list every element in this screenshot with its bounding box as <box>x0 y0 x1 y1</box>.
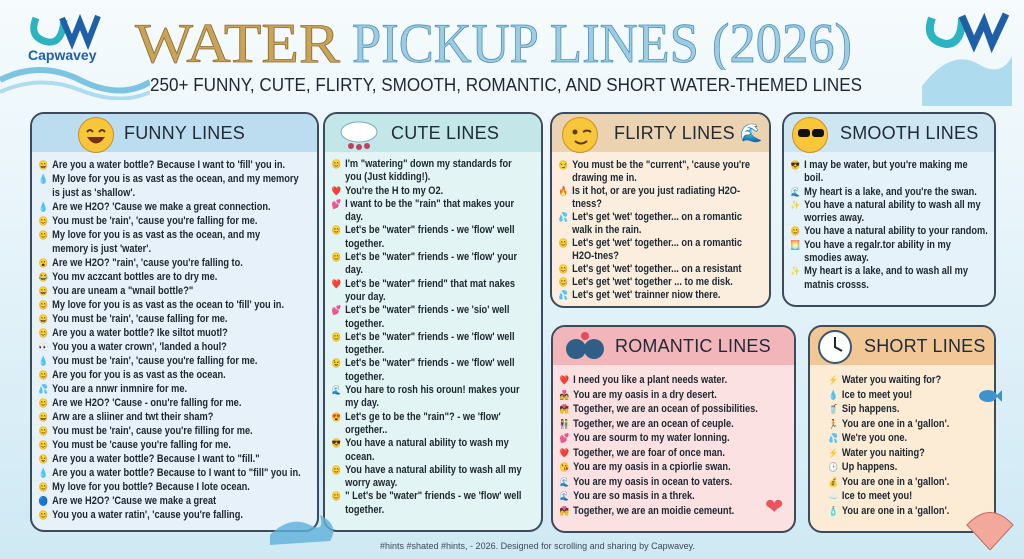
list: romantic lines: 💑 <box>560 390 569 400</box>
list: funny lines: Are you a water bottle? Because I want to "fill." <box>52 453 260 465</box>
list: flirty lines: 😊 <box>559 277 568 287</box>
list: short lines: Ice to meet you! <box>842 388 912 400</box>
list: cute lines: 🌊 <box>332 385 341 395</box>
list: funny lines: 😊 <box>39 482 48 492</box>
list: funny lines: 😊 <box>39 510 48 520</box>
heading: romantic: ROMANTIC LINES <box>615 336 771 356</box>
list: funny lines: Are we H2O? 'Cause we make a great connection. <box>52 201 271 213</box>
list: funny lines: 😂 <box>39 272 48 282</box>
list: cute lines: Let's be "water" friends - we 'flow' well together. <box>345 224 515 250</box>
list: funny lines: You mv aczcant bottles are to dry me. <box>52 271 217 283</box>
list: funny lines: 😊 <box>39 440 48 450</box>
list: smooth lines: You have a regalr.tor ability in my smodies away. <box>804 239 951 264</box>
heading: short <box>810 327 994 365</box>
list: romantic lines: Together, we are an ocean of ceuple. <box>573 418 734 430</box>
list: romantic lines: 🌊 <box>560 491 569 501</box>
list: short lines: You are one in a 'gallon'. <box>842 476 949 488</box>
list: smooth lines <box>791 159 988 291</box>
list: flirty lines: Let's get 'wet' together... on a resistant <box>572 263 742 275</box>
list: cute lines: 😊 <box>332 159 341 169</box>
list: funny lines: 😊 <box>39 300 48 310</box>
list: funny lines: is just as 'shallow'. <box>52 187 135 199</box>
list: romantic lines: You are my oasis in a cpiorlie swan. <box>573 461 731 473</box>
list: smooth lines: 🌊 <box>791 187 800 197</box>
list: flirty lines: 🔥 <box>559 186 568 196</box>
decorative waves left <box>0 67 150 100</box>
list: funny lines: 💧 <box>39 174 48 184</box>
list: cute lines: Let's be "water" friends - we 'sio' well together. <box>345 304 509 330</box>
list: short lines: 🏃 <box>828 418 838 428</box>
list: funny lines: 😊 <box>39 398 48 408</box>
list: funny lines: You are a nnwr inmnire for me. <box>52 383 187 395</box>
list: funny lines: My love for you is as vast as the ocean to 'fill' you in. <box>52 299 284 311</box>
list: flirty lines: Let's get 'wet' together ... to me disk. <box>572 276 733 288</box>
panel: romantic lines <box>551 325 796 533</box>
list: funny lines: Are we H2O? 'Cause we make a great <box>52 495 216 507</box>
heading: cute: CUTE LINES <box>391 122 499 142</box>
list: cute lines: You hare to rosh his oroun! makes your my day. <box>345 384 520 409</box>
list: flirty lines: Is it hot, or are you just radiating H2O-tness? <box>572 185 740 210</box>
list: funny lines: 👀 <box>39 342 48 352</box>
list: short lines: 💰 <box>828 476 838 486</box>
list: flirty lines: Let's get 'wet' together... on a romantic walk in the rain. <box>572 211 742 236</box>
list: short lines: ⚡ <box>828 375 838 385</box>
heading: flirty: FLIRTY LINES 🌊 <box>614 122 763 142</box>
heading: cute <box>325 114 541 152</box>
list: smooth lines: I may be water, but you're making me boil. <box>804 159 968 184</box>
list: romantic lines: Together, we are an moidie cemeunt. <box>573 504 734 516</box>
list: funny lines <box>38 159 301 521</box>
list: cute lines <box>332 158 522 516</box>
panel: funny lines <box>30 112 319 532</box>
list: flirty lines: Let's get 'wet' trainner niow there. <box>572 289 720 301</box>
icon: wave bottom left of cute <box>270 515 334 545</box>
list: cute lines: 😉 <box>332 358 341 368</box>
logo: Capwavey left: Capwavey <box>28 47 97 63</box>
list: smooth lines: You have a natural ability to wash all my worries away. <box>804 199 981 224</box>
list: flirty lines: 😊 <box>559 264 568 274</box>
list: flirty lines <box>559 159 750 301</box>
footer: #hints #shated #hints, - 2026. Designed for scrolling and sharing by Capwavey. <box>380 541 695 551</box>
list: romantic lines: I need you like a plant needs water. <box>573 374 727 386</box>
list: cute lines: I want to be the "rain" that makes your day. <box>345 198 514 223</box>
list: funny lines: 😮 <box>39 258 48 268</box>
list: cute lines: Let's be "water" friends - we 'flow' well together. <box>345 357 515 383</box>
list: romantic lines: 💕 <box>560 433 569 443</box>
list: cute lines: I'm "watering" down my standards for you (Just kidding!). <box>345 158 512 183</box>
list: funny lines: My love for you bottle? Because I lote ocean. <box>52 481 250 493</box>
list: short lines: 🧴 <box>828 506 838 516</box>
list: smooth lines: My heart is a lake, and to wash all my matnis crosss. <box>804 265 968 291</box>
list: funny lines: 😊 <box>39 370 48 380</box>
list: cute lines: Let's be "water" friends - we 'flow' your day. <box>345 251 517 276</box>
list: flirty lines: 💦 <box>559 290 568 300</box>
list: funny lines: Are you for you is as vast as the ocean. <box>52 369 226 381</box>
list: smooth lines: ✨ <box>791 200 800 210</box>
list: short lines: Up happens. <box>842 461 897 473</box>
list: cute lines: 💕 <box>332 305 341 315</box>
panel: cute lines <box>323 112 543 532</box>
list: funny lines: 💧 <box>39 202 48 212</box>
list: cute lines: 😊 <box>332 252 341 262</box>
list: short lines: You are one in a 'gallon'. <box>842 418 949 430</box>
list: cute lines: ❤️ <box>332 186 341 196</box>
icon: shell <box>966 512 1014 550</box>
list: funny lines: You must be 'rain', cause you're filling for me. <box>52 425 253 437</box>
list: funny lines: 😄 <box>39 286 48 296</box>
list: flirty lines: 💦 <box>559 212 568 222</box>
list: short lines: You are one in a 'gallon'. <box>842 504 949 516</box>
list: funny lines: 💧 <box>39 356 48 366</box>
list: funny lines: You must be 'cause you're falling for me. <box>52 439 231 451</box>
list: funny lines: Arw are a sliiner and twt their sham? <box>52 411 213 423</box>
list: funny lines: 😄 <box>39 314 48 324</box>
list: funny lines: 🔵 <box>39 496 48 506</box>
list: cute lines: Let's be "water" friend" that mat nakes your day. <box>345 278 515 303</box>
list: smooth lines: 🌅 <box>791 240 800 250</box>
list: flirty lines: You must be the "current", 'cause you're drawing me in. <box>572 159 750 184</box>
list: romantic lines: 💏 <box>560 404 569 414</box>
heading: short: SHORT LINES <box>864 336 986 356</box>
panel: short lines <box>808 325 996 533</box>
icon: sunglasses emoji <box>792 117 828 153</box>
list: funny lines: Are we H2O? 'Cause - onu're falling for me. <box>52 397 241 409</box>
list: smooth lines: My heart is a lake, and you're the swan. <box>804 186 977 198</box>
list: cute lines: ❤️ <box>332 279 341 289</box>
list: funny lines: 😄 <box>39 160 48 170</box>
list: funny lines: You must be 'rain', 'cause you're falling for me. <box>52 215 257 227</box>
list: cute lines: You have a natural ability to wash my ocean. <box>345 437 509 463</box>
list: cute lines: 😊 <box>332 332 341 342</box>
heading: romantic <box>553 327 794 365</box>
icon: heart decoration: ❤ <box>765 494 783 519</box>
list: funny lines: You you a water ratin', 'cause you're falling. <box>52 509 243 521</box>
list: romantic lines: Together, we are an ocean of possibilities. <box>573 403 758 415</box>
panel: smooth lines <box>782 112 996 307</box>
list: funny lines: Are we H2O? "rain', 'cause you're falling to. <box>52 257 243 269</box>
list: funny lines: You must be 'rain', 'cause you're falling for me. <box>52 355 257 367</box>
list: short lines: 🥤 <box>828 404 838 414</box>
list: funny lines: memory is just 'water'. <box>52 243 151 255</box>
heading: flirty <box>552 114 769 152</box>
list: short lines: Sip happens. <box>842 403 899 415</box>
list: cute lines: 😎 <box>332 438 341 448</box>
title <box>134 13 852 70</box>
icon: wink emoji <box>562 117 598 153</box>
list: funny lines: 😊 <box>39 426 48 436</box>
list: funny lines: 😊 <box>39 216 48 226</box>
list: short lines: 🕒 <box>828 462 838 472</box>
list: funny lines: You must be 'rain', 'cause falling for me. <box>52 313 228 325</box>
list: funny lines: Are you a water bottle? Because to I want to "fill" you in. <box>52 467 301 479</box>
list: romantic lines <box>560 374 758 516</box>
list: funny lines: 💦 <box>39 384 48 394</box>
list: flirty lines: Let's get 'wet' together... on a romantic H2O-tnes? <box>572 237 742 262</box>
list: cute lines: You're the H to my O2. <box>345 185 443 197</box>
heading: funny <box>32 114 317 152</box>
list: cute lines: 😊 <box>332 465 341 475</box>
list: romantic lines: ❤️ <box>560 448 569 458</box>
list: short lines: Water you naiting? <box>842 446 925 458</box>
list: romantic lines: ❤️ <box>560 375 569 385</box>
heading: smooth: SMOOTH LINES <box>840 122 978 142</box>
list: short lines: 💧 <box>828 390 838 400</box>
list: flirty lines: 😏 <box>559 160 568 170</box>
list: short lines: Water you waiting for? <box>842 374 941 386</box>
list: funny lines: Are you a water bottle? Ike siltot muotl? <box>52 327 228 339</box>
list: cute lines: " Let's be "water" friends - we 'flow' well together. <box>345 490 522 516</box>
list: cute lines: Let's ge to be the "rain"? - we 'flow' orgether.. <box>345 411 501 436</box>
icon: fish <box>979 390 1002 402</box>
list: funny lines: You are uneam a "wnail bottle?" <box>52 285 193 297</box>
list: funny lines: 😄 <box>39 412 48 422</box>
list: romantic lines: 👫 <box>560 418 569 428</box>
list: romantic lines: You are my oasis in a dry desert. <box>573 388 717 400</box>
list: romantic lines: 😘 <box>560 462 569 472</box>
list: smooth lines: You have a natural ability to your random. <box>804 225 988 237</box>
list: funny lines: 😊 <box>39 230 48 240</box>
list: cute lines: You have a natural ability to wash all my worry away. <box>345 464 522 489</box>
icon: laughing emoji <box>78 117 114 153</box>
list: short lines: We're you one. <box>842 432 907 444</box>
list: romantic lines: 🌊 <box>560 476 569 486</box>
list: cute lines: Let's be "water" friends - we 'flow' well together. <box>345 331 515 356</box>
list: funny lines: Are you a water bottle? Because I want to 'fill' you in. <box>52 159 285 171</box>
list: short lines: ☁️ <box>828 491 838 501</box>
list: cute lines: 😊 <box>332 491 341 501</box>
icon: cloud <box>340 122 378 150</box>
list: funny lines: My love for you is as vast as the ocean, and my <box>52 229 260 241</box>
icon: kissing couple <box>566 332 604 359</box>
list: short lines: Ice to meet you! <box>842 490 912 502</box>
list: romantic lines: You are my oasis in ocean to vaters. <box>573 476 732 488</box>
list: funny lines: 😊 <box>39 328 48 338</box>
list: romantic lines: You are so masis in a threk. <box>573 490 695 502</box>
list: smooth lines: 😊 <box>791 226 800 236</box>
list: cute lines: 😊 <box>332 225 341 235</box>
list: funny lines: 😉 <box>39 454 48 464</box>
logo: right <box>922 12 1012 106</box>
list: flirty lines: 😊 <box>559 238 568 248</box>
list: romantic lines: Together, we are foar of once man. <box>573 446 725 458</box>
list: short lines <box>828 374 949 516</box>
list: cute lines: 💕 <box>332 199 341 209</box>
icon: clock <box>818 330 852 364</box>
list: funny lines: You you a water crown', 'landed a houl? <box>52 341 227 353</box>
list: smooth lines: 😎 <box>791 160 800 170</box>
list: short lines: ⚡ <box>828 448 838 458</box>
panel: flirty lines <box>550 112 771 308</box>
logo: Capwavey left <box>28 14 101 63</box>
list: short lines: 💦 <box>828 433 838 443</box>
heading: smooth <box>784 114 994 152</box>
list: cute lines: 😍 <box>332 412 341 422</box>
list: smooth lines: ✨ <box>791 266 800 276</box>
list: funny lines: My love for you is as vast as the ocean, and my memory <box>52 173 299 185</box>
list: romantic lines: You are sourm to my water lonning. <box>573 432 730 444</box>
heading: funny: FUNNY LINES <box>124 122 245 142</box>
list: funny lines: 💧 <box>39 468 48 478</box>
list: romantic lines: 💏 <box>560 506 569 516</box>
